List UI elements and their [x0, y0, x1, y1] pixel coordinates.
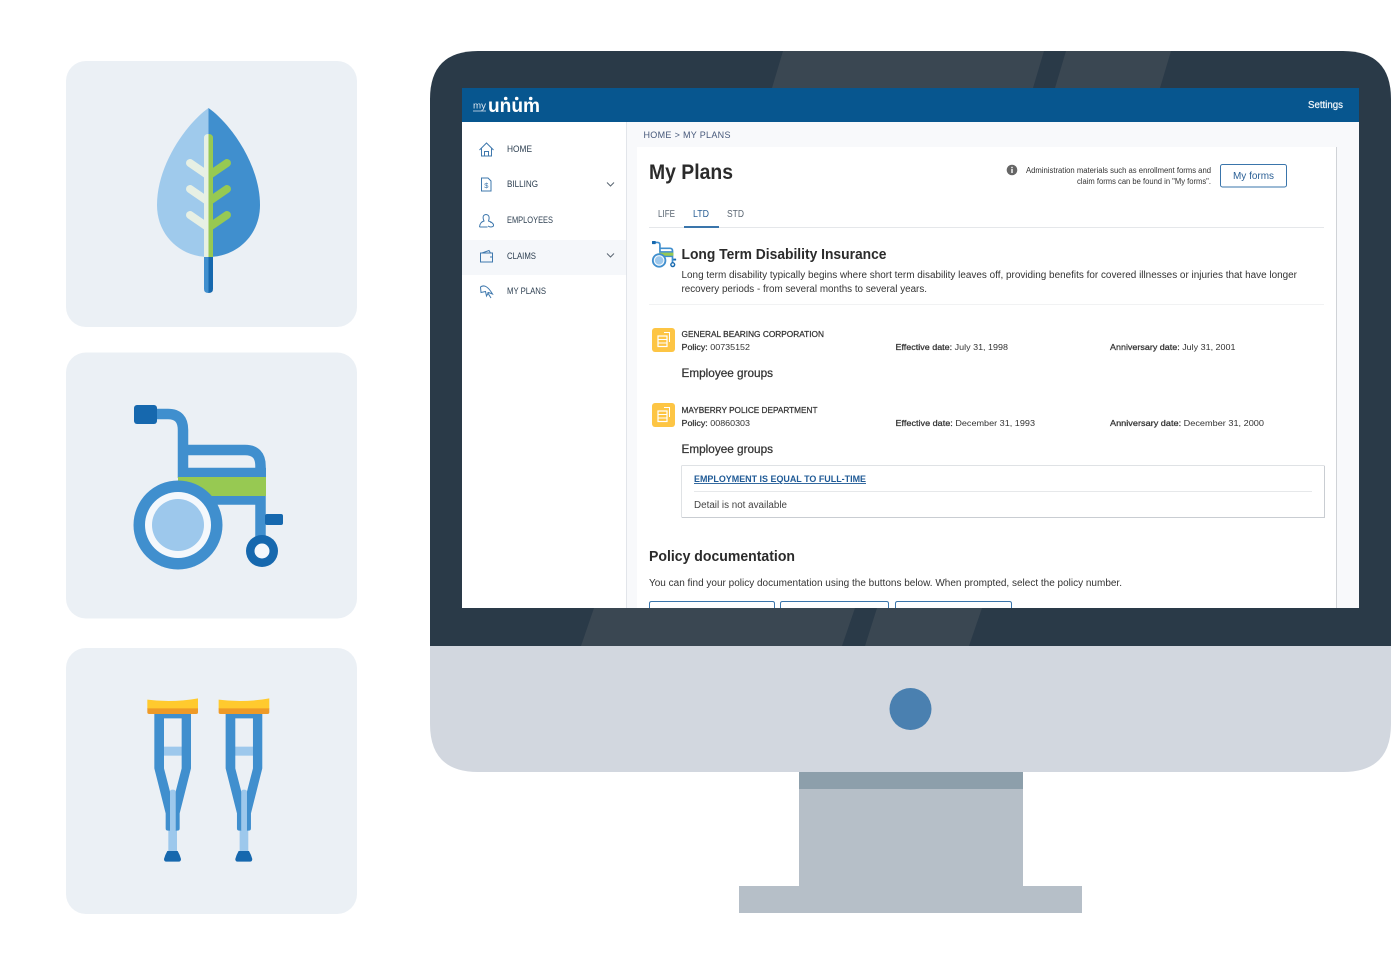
icon: left crutch: [147, 698, 198, 862]
content card: [637, 147, 1337, 608]
settings link: Settings: [1308, 99, 1343, 111]
employee group box: Detail is not available: [694, 500, 787, 511]
policy: mayberry police: Effective date: December 31, 1993: [896, 418, 1035, 428]
nav: employees: [480, 214, 553, 227]
panel: crutches card: [66, 648, 357, 914]
policy: mayberry police: MAYBERRY POLICE DEPARTMENT: [682, 405, 818, 415]
section description: [649, 270, 1324, 305]
policy: general bearing: GENERAL BEARING CORPORATION: [682, 329, 824, 339]
section description: Long term disability typically begins where short term disability leaves off, providing benefits for covered illnesses or injuries that have longer: [682, 270, 1298, 281]
nav: home: [480, 143, 532, 156]
policy: general bearing: [652, 328, 1236, 380]
logo: my: [473, 100, 486, 112]
employee group box: [682, 466, 1324, 518]
tabs: [649, 209, 1324, 228]
power button: [890, 688, 932, 730]
panel: wheelchair card: [66, 352, 357, 618]
monitor body: [430, 51, 1391, 772]
document buttons: [650, 602, 1012, 608]
icon: small wheelchair: [652, 241, 676, 268]
nav: home: HOME: [507, 144, 532, 154]
nav: my plans: [480, 286, 546, 298]
tabs: STD: [727, 209, 744, 220]
forms note: claim forms can be found in "My forms".: [1077, 177, 1211, 186]
policy documentation: [649, 548, 1122, 589]
policy: general bearing: Employee groups: [682, 366, 773, 380]
icon: leaf: [157, 108, 260, 293]
nav: my plans: MY PLANS: [507, 286, 546, 296]
forms note: [1007, 165, 1211, 186]
nav: billing: [482, 178, 614, 191]
nav: employees: EMPLOYEES: [507, 215, 553, 225]
employee group box: EMPLOYMENT IS EQUAL TO FULL-TIME: [694, 474, 866, 484]
breadcrumb: HOME > MY PLANS: [644, 130, 730, 140]
panel: leaf card: [66, 61, 357, 327]
policy: mayberry police: Anniversary date: December 31, 2000: [1110, 418, 1264, 428]
monitor stand: [739, 772, 1082, 913]
header bar: [462, 88, 1359, 122]
screen: app window: [462, 88, 1359, 608]
my forms button: My forms: [1233, 170, 1274, 182]
policy: general bearing: Effective date: July 31, 1998: [896, 342, 1008, 352]
tabs: LIFE: [658, 209, 675, 220]
policy: general bearing: Policy: 00735152: [682, 342, 750, 352]
forms note: Administration materials such as enrollment forms and: [1026, 166, 1211, 175]
nav: billing: $: [484, 181, 489, 190]
my forms button: [1220, 164, 1286, 187]
page title: My Plans: [649, 161, 733, 184]
nav: claims: CLAIMS: [507, 251, 536, 261]
section heading: Long Term Disability Insurance: [682, 246, 886, 263]
policy: mayberry police: [652, 403, 1264, 456]
policy: general bearing: Anniversary date: July 31, 2001: [1110, 342, 1236, 352]
tabs: LTD: [693, 209, 709, 220]
policy: mayberry police: Policy: 00860303: [682, 418, 750, 428]
policy documentation: Policy documentation: [649, 548, 795, 565]
section description: recovery periods - from several months to several years.: [682, 284, 927, 295]
nav: claims: [480, 250, 614, 262]
policy: mayberry police: Employee groups: [682, 442, 773, 456]
logo: unum: [488, 96, 540, 117]
icon: right crutch: [219, 698, 269, 862]
nav: billing: BILLING: [507, 179, 538, 189]
sidebar: [462, 122, 627, 608]
policy documentation: You can find your policy documentation using the buttons below. When prompted, select the policy number.: [649, 578, 1122, 589]
icon: wheelchair: [134, 405, 283, 570]
